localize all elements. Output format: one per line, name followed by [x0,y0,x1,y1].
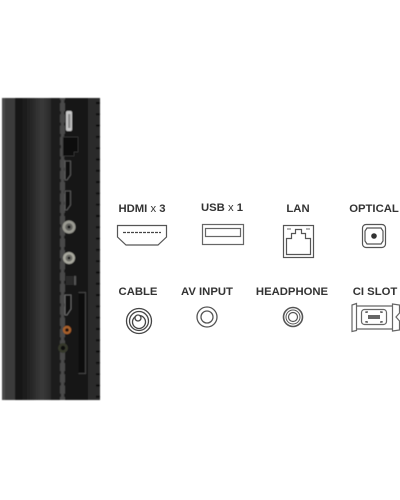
icon: headphone [284,308,302,326]
icon: HDMI [118,226,166,245]
label: CABLE: CABLE [119,286,158,298]
port: second coax [63,252,75,264]
label: AV INPUT: AV INPUT [181,286,233,298]
port: USB [66,111,72,131]
label: HDMI x 3: HDMI x 3 [118,203,166,215]
label: LAN: LAN [286,203,310,215]
port: AV input jack [63,326,71,334]
icon: LAN [284,226,314,258]
port: cable coax [62,220,76,234]
icon: CI slot [352,304,400,332]
label: USB x 1: USB x 1 [201,202,243,214]
icon: optical [362,224,386,248]
port: HDMI 2 [65,191,70,210]
icon: cable [126,308,152,334]
icon: USB [202,224,244,244]
port: optical [66,276,76,285]
port: HDMI 3 [65,295,71,315]
label: OPTICAL: OPTICAL [349,203,399,215]
port: LAN [63,137,78,156]
port: CI slot [78,292,86,374]
label: CI SLOT: CI SLOT [353,286,397,298]
label: HEADPHONE: HEADPHONE [256,286,329,298]
port: headphone jack [58,343,68,353]
panel: TV rear side with ports [2,98,100,400]
port: HDMI 1 [65,161,70,180]
icon: AV input [197,307,217,327]
